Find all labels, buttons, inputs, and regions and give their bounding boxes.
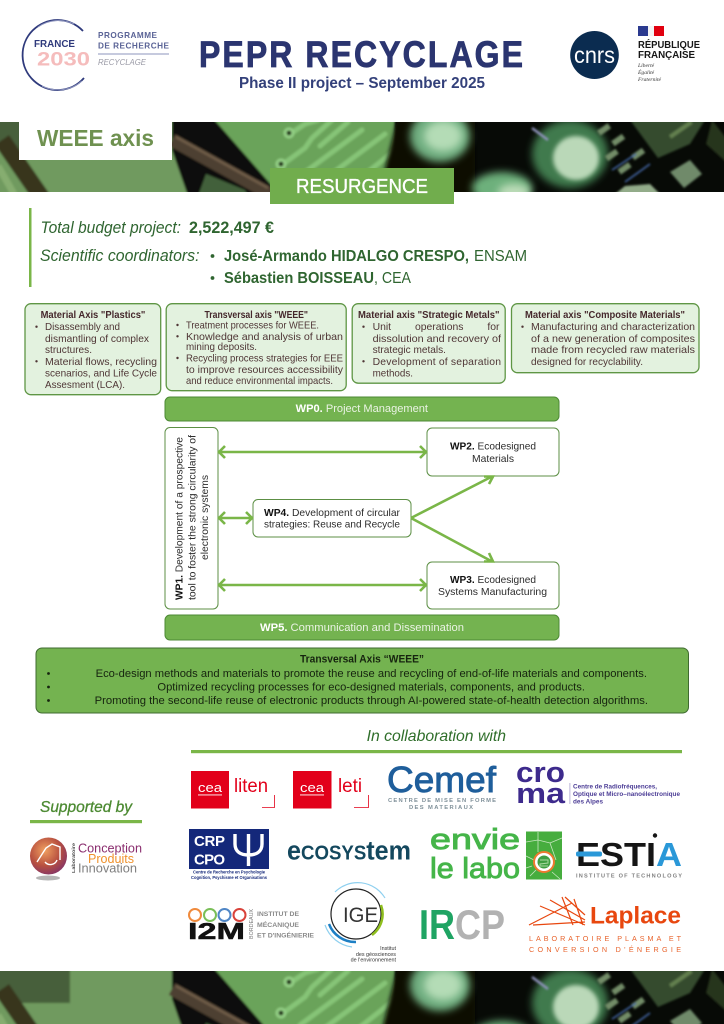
arrow: WP4 to WP2 [411,476,493,518]
panel: Material axis Strategic Metals: dissolution and recovery of [373,334,501,345]
arrow: WP1 to WP3 [219,579,426,591]
panel: Material Axis Plastics: structures. [45,345,92,356]
logo: CRPCPO: CRP [194,833,225,850]
project info: budget and coordinators [29,208,527,287]
panel: Transversal axis WEEE: Transversal axis "WEEE" [204,310,308,321]
badge: WEEE axis [19,122,172,160]
logo: I2M Bordeaux: INSTITUT DE [257,911,299,918]
arrow: WP4 to WP3 [411,518,493,562]
logo: CEA Liten [191,771,274,808]
panel: Material Axis Plastics: dismantling of complex [45,334,150,345]
project info: budget and coordinators: , CEA [374,270,411,287]
logo: CNRS: cnrs [574,42,615,68]
logo: Conception Produits Innovation: Produits [88,852,134,866]
panel: Transversal axis WEEE: to improve resources accessibility [186,365,344,376]
panel: Transversal Axis WEEE summary: Eco-design methods and materials to promote the reuse and recycling of end-of-life materials and components. [96,668,647,680]
panel: Material Axis Plastics [25,304,161,395]
badge: WEEE axis: WEEE axis [37,125,154,151]
logo: Cemef: DES MATERIAUX [409,805,473,811]
bottom banner photo [0,971,724,1024]
logo: CEA Leti: leti [338,776,362,797]
logo: CROMA: Centre de Radiofréquences, [573,784,657,790]
work package bar: WP0: WP0. Project Management [296,403,428,415]
logo: CEA Liten: liten [234,776,268,797]
work package box: WP4: WP4. Development of circular [264,508,401,519]
logo: IRCP: IRCP [419,901,505,948]
arrow: WP1 to WP2 [219,446,426,458]
panel: Material axis Composite Materials [512,304,699,373]
logo: CROMA: Optique et Micro–nanoélectronique [573,792,681,798]
project info: budget and coordinators: 2,522,497 € [189,219,274,237]
logo: envie le labo: le labo [430,853,520,885]
logo: Laplace: LABORATOIRE PLASMA ET [529,934,682,943]
work package bar: WP5 [165,615,559,640]
work package box: WP3: Systems Manufacturing [438,587,547,598]
work package bar: WP5: WP5. Communication and Dissemination [260,622,464,634]
logo: I2M Bordeaux: BORDEAUX [249,909,255,939]
panel: Material axis Strategic Metals: Unit operations for the [373,322,538,333]
logo: IGE: Institut [380,946,396,952]
logo: CEA Leti: cea [300,780,325,795]
title: PEPR RECYCLAGE [199,35,523,76]
heading: Supported by: Supported by [40,799,133,816]
badge: RESURGENCE [270,168,454,204]
project info: budget and coordinators: Total budget project: [40,219,181,237]
panel: Transversal Axis WEEE summary [36,648,688,713]
logo: République Française: Fraternité [637,77,662,83]
header logo: France 2030 programme de recherche [23,20,170,90]
arrow: WP1 to WP4 [219,512,252,524]
logo: République Française [637,26,700,83]
panel: Transversal Axis WEEE summary: Promoting the second-life reuse of electronic products through AI-powered state-of-health detection algorithms. [95,695,648,707]
logo: CNRS [570,31,619,79]
logo: République Française: Liberté [637,63,655,69]
panel: Transversal Axis WEEE summary: Optimized recycling processes for eco-designed materials, components, and products. [157,682,585,694]
logo: CROMA: cro [516,757,565,789]
logo: Conception Produits Innovation: Conception [78,842,142,856]
panel: Transversal axis WEEE [166,304,346,391]
logo: I2M Bordeaux [188,909,314,944]
work package box: WP4: strategies: Reuse and Recycle [264,520,400,530]
logo: CROMA: des Alpes [573,800,604,806]
panel: Material axis Composite Materials: Material axis "Composite Materials" [525,310,685,321]
logo: République Française: Égalité [637,68,655,76]
panel: Material axis Strategic Metals [352,304,538,383]
header logo: France 2030 programme de recherche: DE RECHERCHE [98,42,170,50]
panel: Material Axis Plastics: Material Axis "Plastics" [41,310,145,321]
work package box: WP1: tool to foster the strong circularity of [188,435,198,600]
logo: Laplace [529,897,682,954]
panel: Material axis Strategic Metals: strategic metals. [373,345,446,356]
badge: RESURGENCE: RESURGENCE [296,176,428,198]
logo: CEA Liten: cea [198,780,223,795]
work package box: WP1: WP1. Development of a prospective [174,437,186,600]
project info: budget and coordinators: ENSAM [474,248,527,265]
panel: Material axis Composite Materials: Manufacturing and characterization [531,322,695,333]
panel: Material axis Composite Materials: designed for recyclability. [531,357,643,368]
logo: CROMA: ma [516,778,566,810]
logo: IGE: IGE [343,904,378,927]
logo: Laplace: Laplace [590,902,681,930]
project info: budget and coordinators: José-Armando HIDALGO CRESPO, [224,248,469,265]
heading: In collaboration with [191,728,682,753]
panel: Material Axis Plastics: Disassembly and [45,322,120,333]
logo: CEA Leti [293,771,368,808]
panel: Transversal axis WEEE: Treatment processes for WEEE. [186,320,319,332]
work package box: WP1 [165,428,218,609]
logo: CRPCPO: CPO [194,852,225,868]
header logo: France 2030 programme de recherche: 2030 [37,50,90,70]
logo: Conception Produits Innovation: Laboratoire [71,843,77,873]
panel: Material axis Strategic Metals: Material axis "Strategic Metals" [358,310,500,321]
logo: envie le labo: envie [430,824,520,856]
logo: I2M Bordeaux: ET D'INGÉNIERIE [257,930,314,940]
panel: Transversal axis WEEE: mining deposits. [186,342,257,353]
work package box: WP2: Materials [472,454,514,465]
logo: ecosystem: eCOSYStem [287,836,411,866]
logo: Cemef: CENTRE DE MISE EN FORME [388,798,496,804]
panel: Transversal axis WEEE: Recycling process strategies for EEE [186,354,343,364]
work package box: WP4 [253,500,411,537]
panel: Material Axis Plastics: Material flows, recycling [45,357,157,368]
logo: République Française: FRANÇAISE [638,50,695,61]
subtitle: Phase II project – September 2025 [239,75,485,92]
header logo: France 2030 programme de recherche: FRANCE [34,38,75,50]
logo: IGE: de l'environnement [351,958,396,964]
panel: Transversal axis WEEE: and reduce environmental impacts. [186,376,333,387]
logo: envie le labo [430,824,562,885]
panel: Material Axis Plastics: Assesment (LCA). [45,380,125,391]
panel: Material Axis Plastics: scenarios, and Life Cycle [45,368,157,380]
project info: budget and coordinators: Scientific coordinators: [40,247,200,265]
work package box: WP1: electronic systems [200,475,211,560]
logo: Cemef: Cemef [387,759,497,800]
header logo: France 2030 programme de recherche: PROGRAMME [98,31,158,40]
logo: I2M Bordeaux: I2M [188,918,245,944]
header logo: France 2030 programme de recherche: RECYCLAGE [98,58,147,67]
top banner photo [0,122,724,192]
logo: Conception Produits Innovation [30,838,142,880]
logo: Laplace: CONVERSION D'ÉNERGIE [529,945,681,954]
logo: CROMA [516,757,681,810]
panel: Material axis Composite Materials: of a new generation of composites [531,334,695,345]
logo: I2M Bordeaux: MÉCANIQUE [257,920,299,929]
panel: Transversal Axis WEEE summary: Transversal Axis “WEEE” [300,654,424,666]
work package box: WP2 [427,428,559,476]
panel: Material axis Strategic Metals: methods. [373,368,413,380]
work package box: WP3 [427,562,559,609]
work package bar: WP0 [165,397,559,421]
work package box: WP2: WP2. Ecodesigned [450,442,536,452]
logo: Conception Produits Innovation: Innovation [78,862,137,876]
logo: CRPCPO: Centre de Recherche en Psychologie [193,870,266,874]
logo: CRPCPO [189,829,269,880]
project info: budget and coordinators: Sébastien BOISSEAU [224,270,374,287]
panel: Material axis Strategic Metals: Development of separation [373,357,501,368]
logo: IGE [325,883,396,964]
work package box: WP3: WP3. Ecodesigned [450,575,536,586]
panel: Transversal axis WEEE: Knowledge and analysis of urban [186,332,343,343]
logo: République Française: RÉPUBLIQUE [638,38,700,51]
heading: Supported by [30,799,142,823]
logo: CRPCPO: Cognition, Psychisme et Organisations [191,875,268,880]
panel: Material axis Composite Materials: made from recycled raw materials [531,345,695,356]
heading: In collaboration with: In collaboration with [367,728,506,745]
logo: ESTIA: INSTITUTE OF TECHNOLOGY [576,874,682,880]
logo: IGE: des géosciences [356,952,396,958]
logo: ESTIA: ESTIA [576,836,682,873]
